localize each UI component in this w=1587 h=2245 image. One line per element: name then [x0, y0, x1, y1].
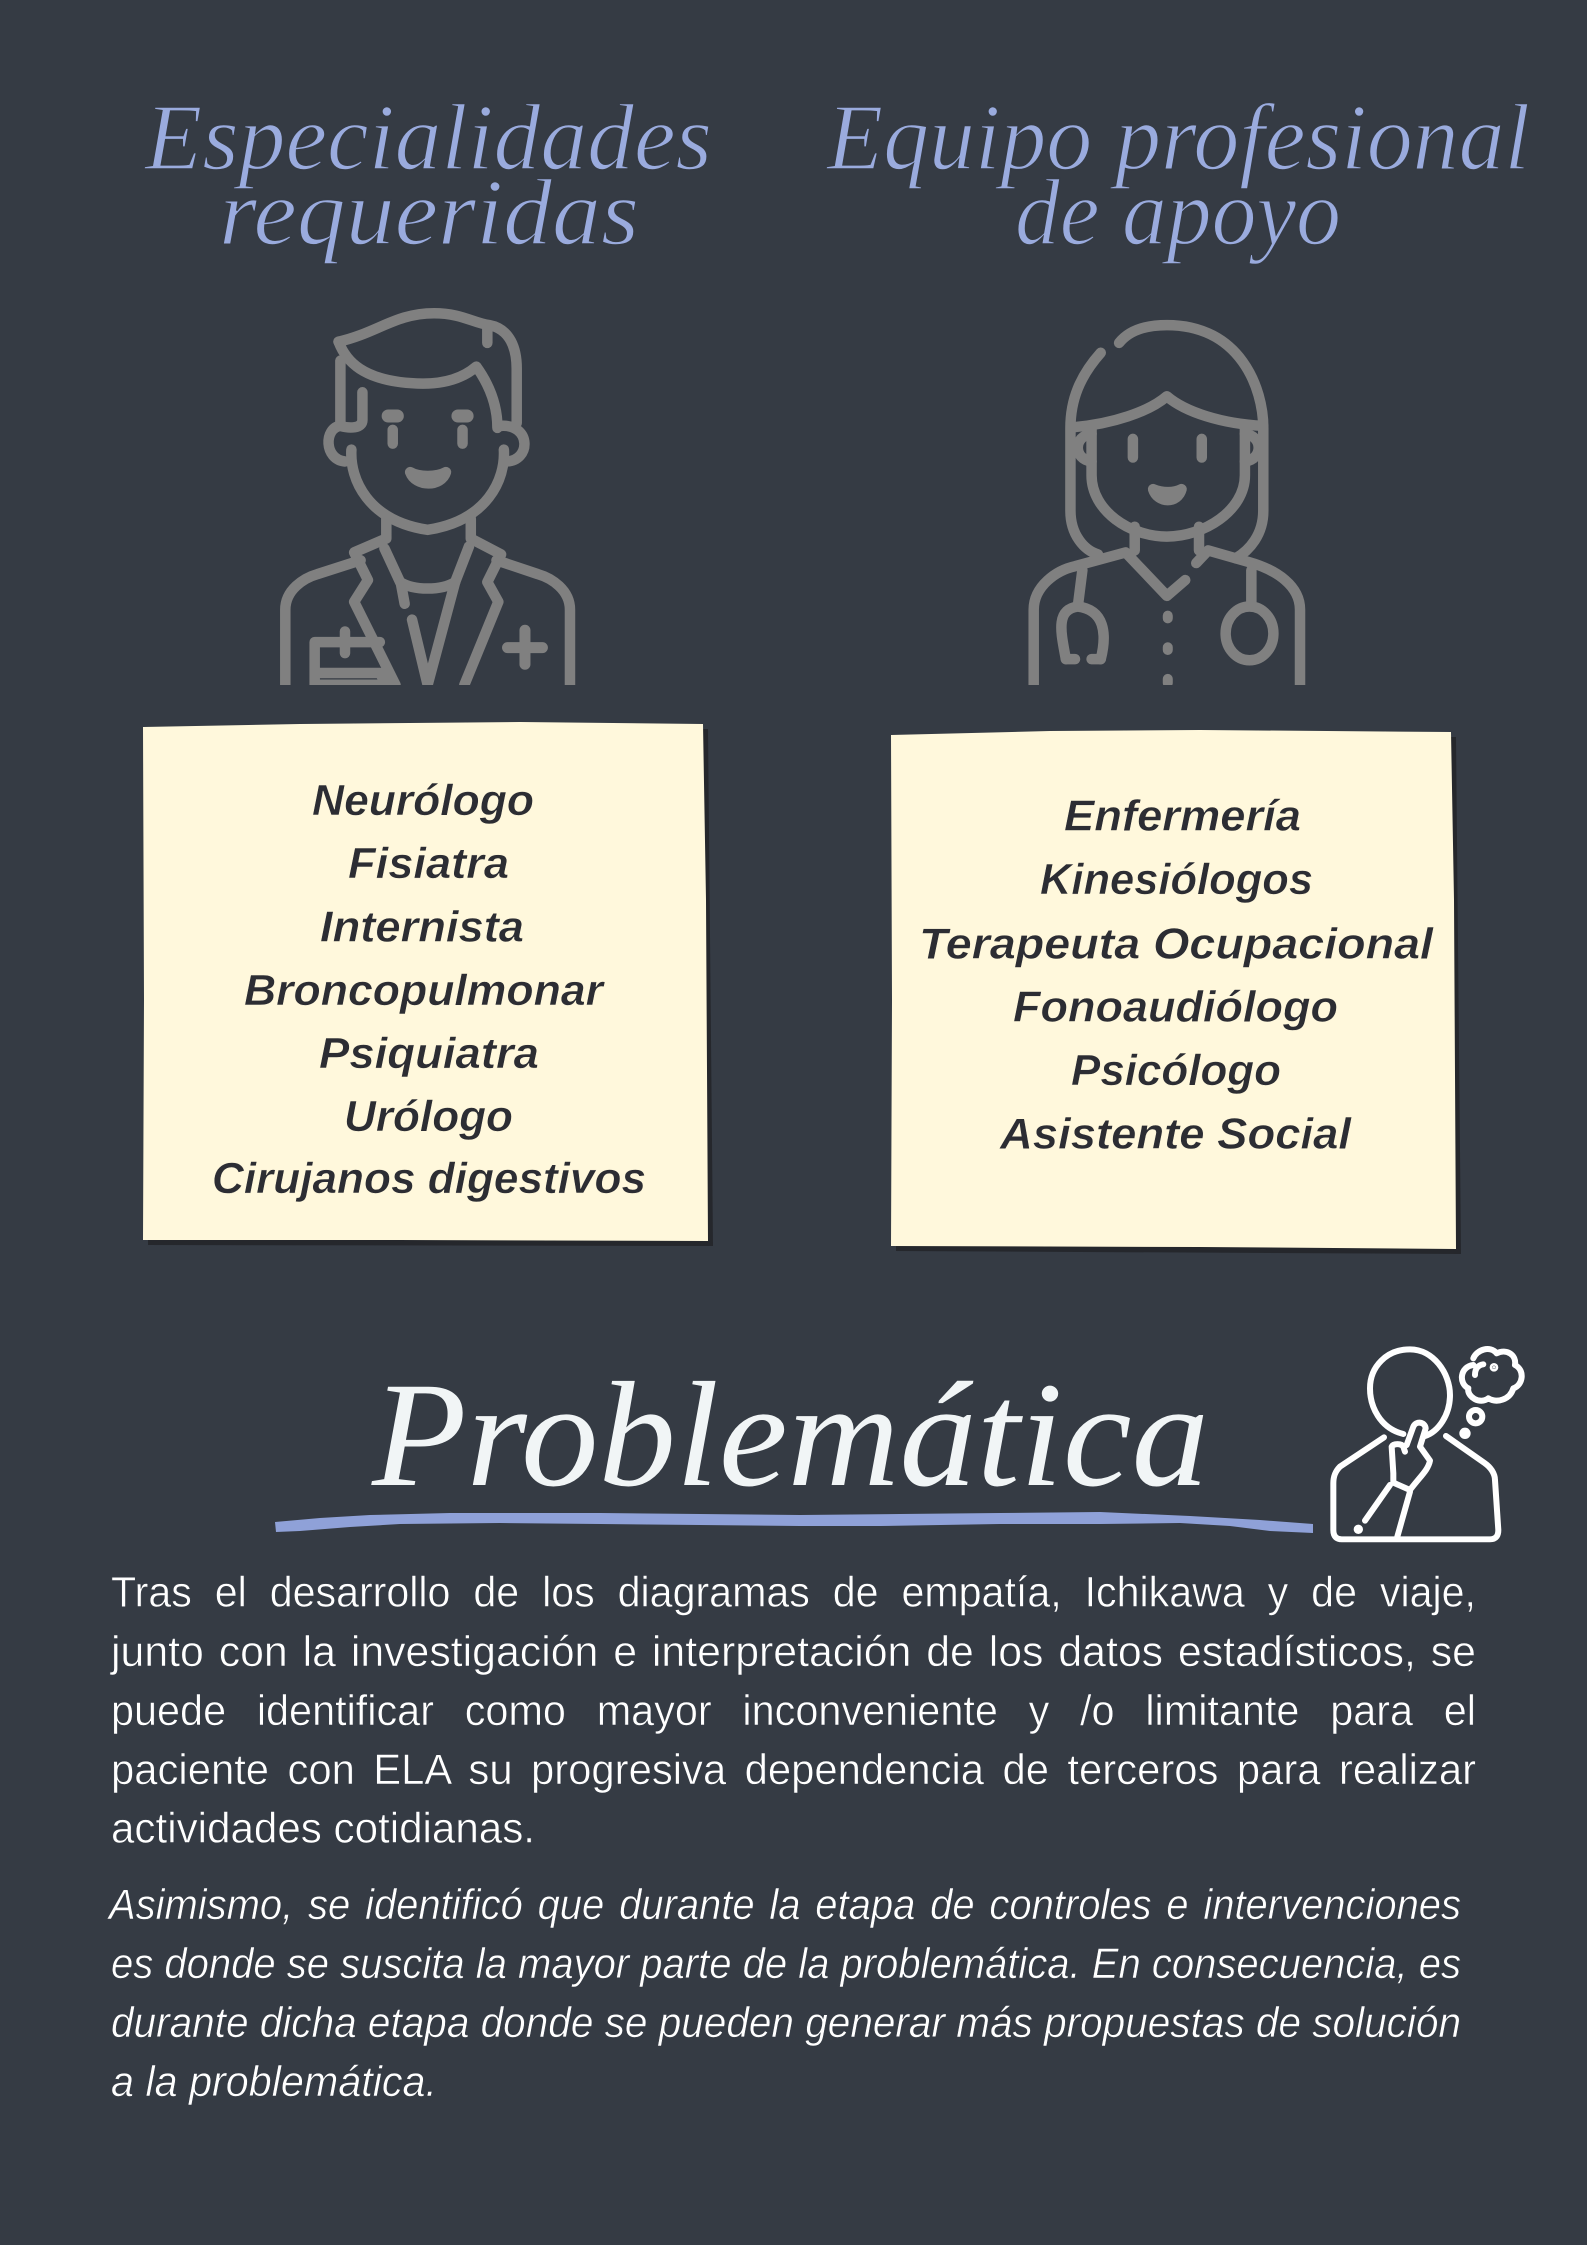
heading: Equipo profesional de apoyo: de apoyo [1015, 161, 1341, 265]
list: equipo: Enfermería [1064, 792, 1301, 840]
paragraph: italic text [106, 1881, 1461, 2106]
list: especialidades: Urólogo [344, 1092, 513, 1141]
list: especialidades: Internista [320, 902, 524, 952]
paragraph: body text: paciente con ELA su progresiva dependencia de terceros para realizar [111, 1746, 1476, 1794]
paragraph: body text: puede identificar como mayor inconveniente y /o limitante para el [111, 1687, 1476, 1735]
paragraph: italic text: durante dicha etapa donde se pueden generar más propuestas de solución [111, 1999, 1461, 2047]
list: equipo: Kinesiólogos [1040, 855, 1313, 904]
list: equipo [919, 792, 1434, 1159]
heading: Especialidades requeridas: requeridas [219, 161, 639, 265]
panel: especialidades note [143, 722, 713, 1246]
list: especialidades [212, 776, 646, 1203]
infographic canvas [108, 103, 1528, 2105]
list: especialidades: Psiquiatra [319, 1029, 539, 1078]
list: especialidades: Broncopulmonar [244, 966, 606, 1015]
list: equipo: Fonoaudiólogo [1013, 983, 1338, 1032]
paragraph: italic text: es donde se suscita la mayor parte de la problemática. En consecuencia, es [111, 1940, 1461, 1988]
paragraph: italic text: a la problemática. [111, 2058, 437, 2106]
icon: female nurse [1034, 325, 1300, 689]
heading: Equipo profesional de apoyo: Equipo profesional [825, 86, 1530, 190]
title: Problemática: Problemática [371, 1352, 1209, 1518]
icon: male doctor [285, 313, 570, 689]
paragraph: italic text: Asimismo, se identificó que durante la etapa de controles e intervenciones [106, 1881, 1461, 1929]
list: equipo: Terapeuta Ocupacional [919, 920, 1434, 968]
heading: Especialidades requeridas: Especialidades [143, 86, 712, 190]
paragraph: body text: junto con la investigación e interpretación de los datos estadísticos, se [109, 1628, 1476, 1676]
list: especialidades: Neurólogo [312, 776, 534, 825]
paragraph: body text: actividades cotidianas. [111, 1805, 535, 1853]
icon: thinking person [1333, 1349, 1522, 1539]
heading: Especialidades requeridas [143, 86, 712, 265]
panel: equipo note [891, 730, 1461, 1254]
heading: Equipo profesional de apoyo [825, 86, 1530, 265]
underline brush stroke [275, 1512, 1313, 1533]
list: equipo: Psicólogo [1071, 1046, 1281, 1095]
list: especialidades: Cirujanos digestivos [212, 1154, 646, 1203]
list: equipo: Asistente Social [999, 1110, 1352, 1159]
paragraph: body text: Tras el desarrollo de los diagramas de empatía, Ichikawa y de viaje, [111, 1569, 1476, 1617]
list: especialidades: Fisiatra [348, 839, 509, 888]
paragraph: body text [109, 1569, 1476, 1853]
